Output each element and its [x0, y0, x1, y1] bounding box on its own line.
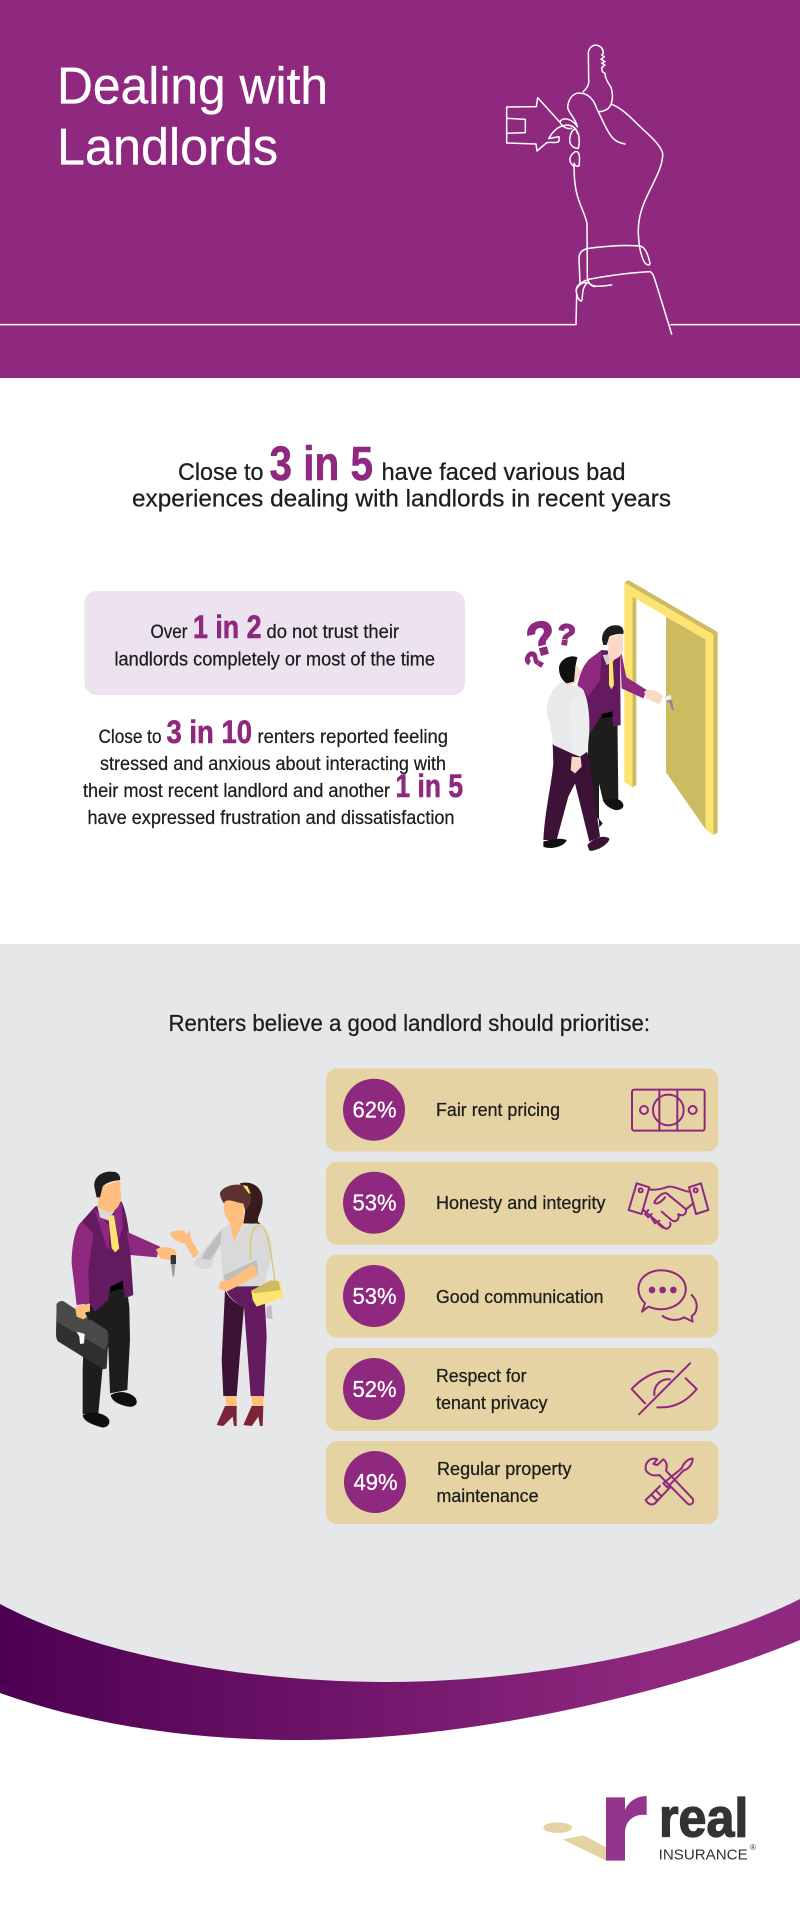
- card: regular property maintenance: Regular property: [437, 1458, 572, 1479]
- callout: 1 in 2 trust: Over: [150, 622, 188, 643]
- icon: question marks: ?: [521, 610, 562, 667]
- door frame: [624, 580, 718, 835]
- card: fair rent pricing: 62%: [352, 1096, 396, 1122]
- card: good communication: 53%: [352, 1283, 396, 1309]
- title: [57, 58, 328, 176]
- card: respect for tenant privacy: Respect for: [436, 1365, 526, 1386]
- card: honesty and integrity: Honesty and integrity: [436, 1192, 606, 1213]
- icon: question marks: ?: [555, 618, 577, 653]
- title: Dealing with: [57, 58, 328, 116]
- card: respect for tenant privacy: 52%: [352, 1376, 396, 1402]
- panel: header banner: [0, 0, 800, 378]
- card: regular property maintenance: [326, 1441, 718, 1524]
- text block: stress and frustration: 1 in 5: [396, 768, 463, 804]
- card: honesty and integrity: 53%: [352, 1190, 396, 1216]
- logo: Real Insurance: ®: [750, 1843, 756, 1852]
- heading: 3 in 5 statistic: experiences dealing with landlords in recent years: [132, 486, 671, 512]
- icon: wrench and screwdriver: [646, 1459, 693, 1504]
- icon: question marks: [519, 610, 577, 674]
- callout: 1 in 2 trust: do not trust their: [266, 622, 400, 643]
- illustration: landlord at door with confused renter: [519, 580, 718, 851]
- heading: 3 in 5 statistic: Close to: [178, 459, 264, 486]
- heading: 3 in 5 statistic: 3 in 5: [270, 438, 373, 491]
- callout: 1 in 2 trust: 1 in 2: [193, 609, 262, 645]
- heading: 3 in 5 statistic: [132, 438, 671, 512]
- icon: handshake: [629, 1183, 708, 1229]
- icon: line-art hand holding house key: [0, 45, 800, 334]
- callout: 1 in 2 trust: landlords completely or most of the time: [114, 650, 435, 670]
- text block: stress and frustration: [83, 714, 463, 829]
- text block: stress and frustration: renters reported feeling: [258, 727, 448, 748]
- icon: crossed-out eye: [632, 1363, 697, 1414]
- heading: 3 in 5 statistic: have faced various bad: [382, 459, 626, 486]
- list: priority cards: [326, 1068, 718, 1524]
- card: regular property maintenance: 49%: [354, 1469, 398, 1495]
- illustration: landlord handing keys to tenant: [56, 1172, 283, 1427]
- icon: banknote: [632, 1090, 705, 1131]
- text block: stress and frustration: Close to: [98, 727, 162, 748]
- text block: stress and frustration: have expressed frustration and dissatisfaction: [88, 808, 454, 829]
- card: good communication: Good communication: [436, 1286, 604, 1307]
- card: respect for tenant privacy: [326, 1348, 718, 1431]
- man in purple suit: [577, 625, 674, 827]
- title: Landlords: [57, 118, 278, 176]
- tenant: [170, 1183, 283, 1426]
- briefcase: [56, 1301, 108, 1369]
- logo: Real Insurance: INSURANCE: [659, 1846, 748, 1863]
- icon: speech bubbles: [638, 1270, 697, 1322]
- logo: Real Insurance: [543, 1787, 756, 1863]
- heading: priorities: Renters believe a good landlord should prioritise:: [168, 1010, 650, 1036]
- panel: good landlord priorities: [0, 944, 800, 1740]
- text block: stress and frustration: their most recent landlord and another: [83, 781, 391, 802]
- icon: question marks: ?: [519, 647, 551, 674]
- card: fair rent pricing: Fair rent pricing: [436, 1099, 560, 1120]
- landlord: [72, 1172, 177, 1427]
- card: respect for tenant privacy: tenant privacy: [436, 1392, 548, 1413]
- text block: stress and frustration: stressed and anxious about interacting with: [100, 754, 446, 775]
- icons: priority icons: [629, 1090, 708, 1504]
- text block: stress and frustration: 3 in 10: [166, 714, 252, 750]
- card: regular property maintenance: maintenance: [436, 1485, 538, 1506]
- logo: Real Insurance: real: [659, 1787, 748, 1849]
- card: honesty and integrity: [326, 1162, 718, 1245]
- renter in white shirt: [543, 656, 609, 851]
- callout: 1 in 2 trust: [84, 591, 465, 695]
- card: good communication: [326, 1255, 718, 1338]
- card: fair rent pricing: [326, 1068, 718, 1152]
